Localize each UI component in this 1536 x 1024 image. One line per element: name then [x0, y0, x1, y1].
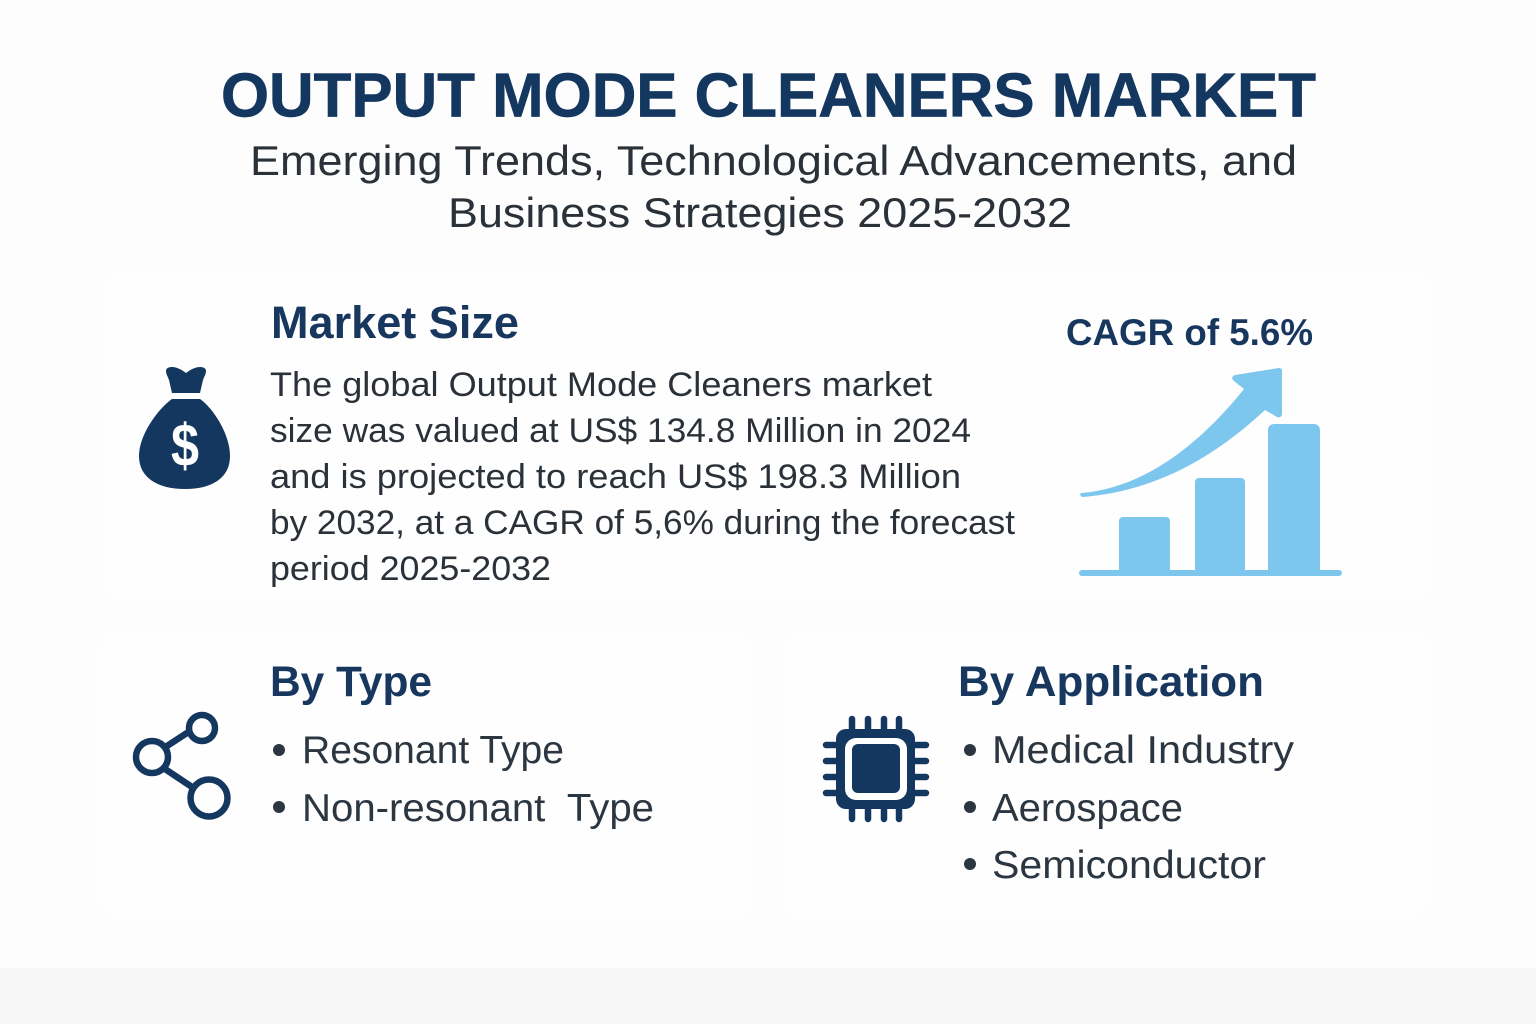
icon: share nodes — [136, 715, 228, 816]
panel: market size — [105, 270, 1430, 600]
icon: microchip — [826, 719, 926, 819]
market size description — [270, 366, 1016, 588]
bar 3 — [1268, 424, 1320, 571]
bar 1 — [1119, 517, 1170, 571]
market size description: by 2032, at a CAGR of 5,6% during the forecast — [270, 504, 1016, 542]
application list — [964, 729, 1295, 887]
bar 2 — [1195, 478, 1245, 571]
market size description: and is projected to reach US$ 198.3 Million — [270, 458, 961, 496]
application list: Aerospace — [992, 787, 1183, 830]
by application heading: By Application — [958, 658, 1264, 706]
chart baseline — [1079, 570, 1342, 576]
panel: by application — [785, 630, 1430, 918]
icon: money bag — [139, 367, 230, 489]
market size description: The global Output Mode Cleaners market — [270, 366, 933, 404]
subtitle: Emerging Trends, Technological Advancements, and — [250, 137, 1297, 184]
CAGR label: CAGR of 5.6% — [1066, 312, 1313, 353]
growth arrow — [1080, 368, 1282, 497]
type list: Non-resonant Type — [302, 787, 654, 830]
panel: by type — [100, 630, 752, 918]
subtitle: Business Strategies 2025-2032 — [448, 189, 1072, 236]
market size description: period 2025-2032 — [270, 550, 551, 588]
market size heading: Market Size — [271, 297, 519, 348]
market size description: size was valued at US$ 134.8 Million in 2024 — [270, 412, 971, 450]
application list: Semiconductor — [992, 844, 1266, 887]
title: OUTPUT MODE CLEANERS MARKET — [221, 62, 1316, 130]
subtitle — [250, 137, 1297, 236]
chart: growth bars and arrow — [1079, 368, 1342, 576]
type list: Resonant Type — [302, 729, 564, 772]
by type heading: By Type — [270, 658, 432, 706]
type list — [273, 729, 654, 830]
application list: Medical Industry — [992, 729, 1295, 772]
icon: money bag: $ — [171, 412, 199, 479]
